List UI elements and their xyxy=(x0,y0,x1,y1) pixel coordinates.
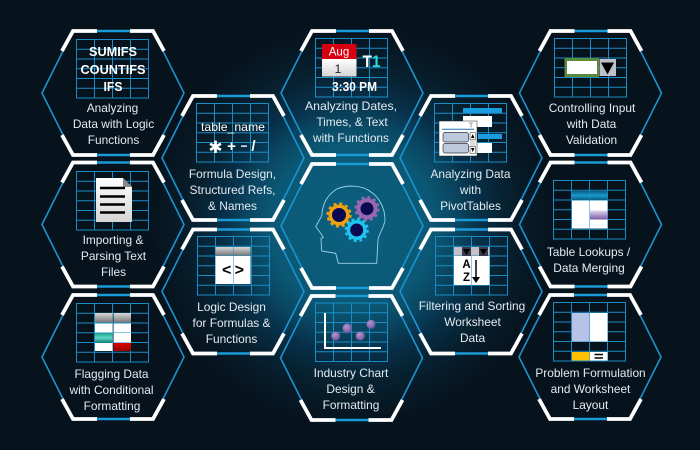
label: Formatting xyxy=(84,399,140,413)
icon: scatter chart xyxy=(325,313,381,348)
icon: calendar: 1 xyxy=(335,62,342,76)
label: Table Lookups / xyxy=(547,245,631,259)
label: with Conditional xyxy=(69,383,153,397)
panel: problem formulation and worksheet layout xyxy=(519,295,661,419)
label: Functions xyxy=(88,133,139,147)
icon: table name and operators xyxy=(201,120,265,158)
label: Logic Design xyxy=(197,300,266,314)
icon: angle brackets in cells xyxy=(216,247,250,284)
label: Data with Logic xyxy=(73,117,154,131)
icon: table name and operators: − xyxy=(240,139,248,153)
icon: time: 3:30 PM xyxy=(332,80,377,94)
label: with xyxy=(459,183,481,197)
icon: blue gear xyxy=(346,219,368,241)
label: Importing & xyxy=(83,233,143,247)
icon: slicer panel xyxy=(439,121,477,156)
label: for Formulas & xyxy=(193,316,271,330)
label: Filtering and Sorting xyxy=(419,299,525,313)
label: with Data xyxy=(566,117,617,131)
icon: table name and operators: + xyxy=(227,138,236,155)
panel: filtering and sorting worksheet data xyxy=(400,230,542,354)
label: Formatting xyxy=(323,398,379,412)
label: Times, & Text xyxy=(316,115,388,129)
label: Functions xyxy=(206,332,257,346)
panel: flagging data with conditional formatting xyxy=(42,295,184,419)
panel: industry chart design and formatting xyxy=(280,296,422,420)
label: Data xyxy=(460,331,485,345)
icon: logic function names: SUMIFS xyxy=(89,45,137,59)
label: Data Merging xyxy=(553,261,625,275)
label: Problem Formulation xyxy=(535,366,646,380)
icon: worksheet layout cells xyxy=(572,313,608,360)
label: and Worksheet xyxy=(551,382,631,396)
icon: text document xyxy=(96,178,132,222)
label: Structured Refs, xyxy=(190,183,275,197)
icon: conditional formatting cells xyxy=(95,313,131,351)
icon: purple gear xyxy=(356,197,378,220)
icon: lookup table cells xyxy=(572,191,608,228)
label: Layout xyxy=(573,398,609,412)
label: PivotTables xyxy=(440,199,501,213)
icon: table name and operators: / xyxy=(251,138,256,155)
icon: filter and sort cells: Z xyxy=(463,272,470,284)
panel: analyzing data with pivottables xyxy=(400,96,542,220)
label: with Functions xyxy=(312,131,389,145)
panel: logic design for formulas and functions xyxy=(162,230,304,354)
panel: formula design, structured refs and names xyxy=(162,96,304,220)
label: Validation xyxy=(566,133,617,147)
panel: table lookups and data merging xyxy=(520,162,662,286)
label: Design & xyxy=(326,382,375,396)
label: Parsing Text xyxy=(81,249,147,263)
label: & Names xyxy=(208,199,257,213)
panel: central head with gears xyxy=(281,164,423,288)
icon: T1 text: T1 xyxy=(362,52,380,71)
icon: logic function names xyxy=(80,45,146,94)
label: Worksheet xyxy=(444,315,501,329)
label: Files xyxy=(101,265,126,279)
icon: logic function names: IFS xyxy=(104,80,122,94)
label: Analyzing Data xyxy=(431,167,511,181)
icon: table name and operators: ✱ xyxy=(208,138,223,158)
label: Formula Design, xyxy=(189,167,276,181)
panel: controlling input with data validation xyxy=(520,31,662,155)
icon: validation dropdown xyxy=(564,58,616,77)
panel: analyzing dates, times and text with functions xyxy=(281,31,423,155)
panel: importing and parsing text files xyxy=(42,162,184,286)
icon: angle brackets in cells: <> xyxy=(222,262,244,279)
label: Controlling Input xyxy=(549,101,636,115)
icon: table name and operators: table_name xyxy=(201,120,265,134)
icon: logic function names: COUNTIFS xyxy=(80,63,146,77)
label: Analyzing xyxy=(87,101,138,115)
icon: calendar: Aug xyxy=(329,46,349,58)
icon: orange gear xyxy=(328,204,350,226)
label: Industry Chart xyxy=(314,366,389,380)
icon: filter and sort cells: A xyxy=(462,259,471,271)
icon: filter and sort cells xyxy=(454,247,490,285)
label: Analyzing Dates, xyxy=(305,99,397,113)
panel: analyzing data with logic functions xyxy=(42,31,184,155)
icon: slicer panel: T xyxy=(469,122,474,130)
icon: calendar xyxy=(322,44,356,76)
icon: head outline xyxy=(316,186,385,263)
label: Flagging Data xyxy=(74,367,149,381)
icon: pivot table bars xyxy=(463,108,502,153)
